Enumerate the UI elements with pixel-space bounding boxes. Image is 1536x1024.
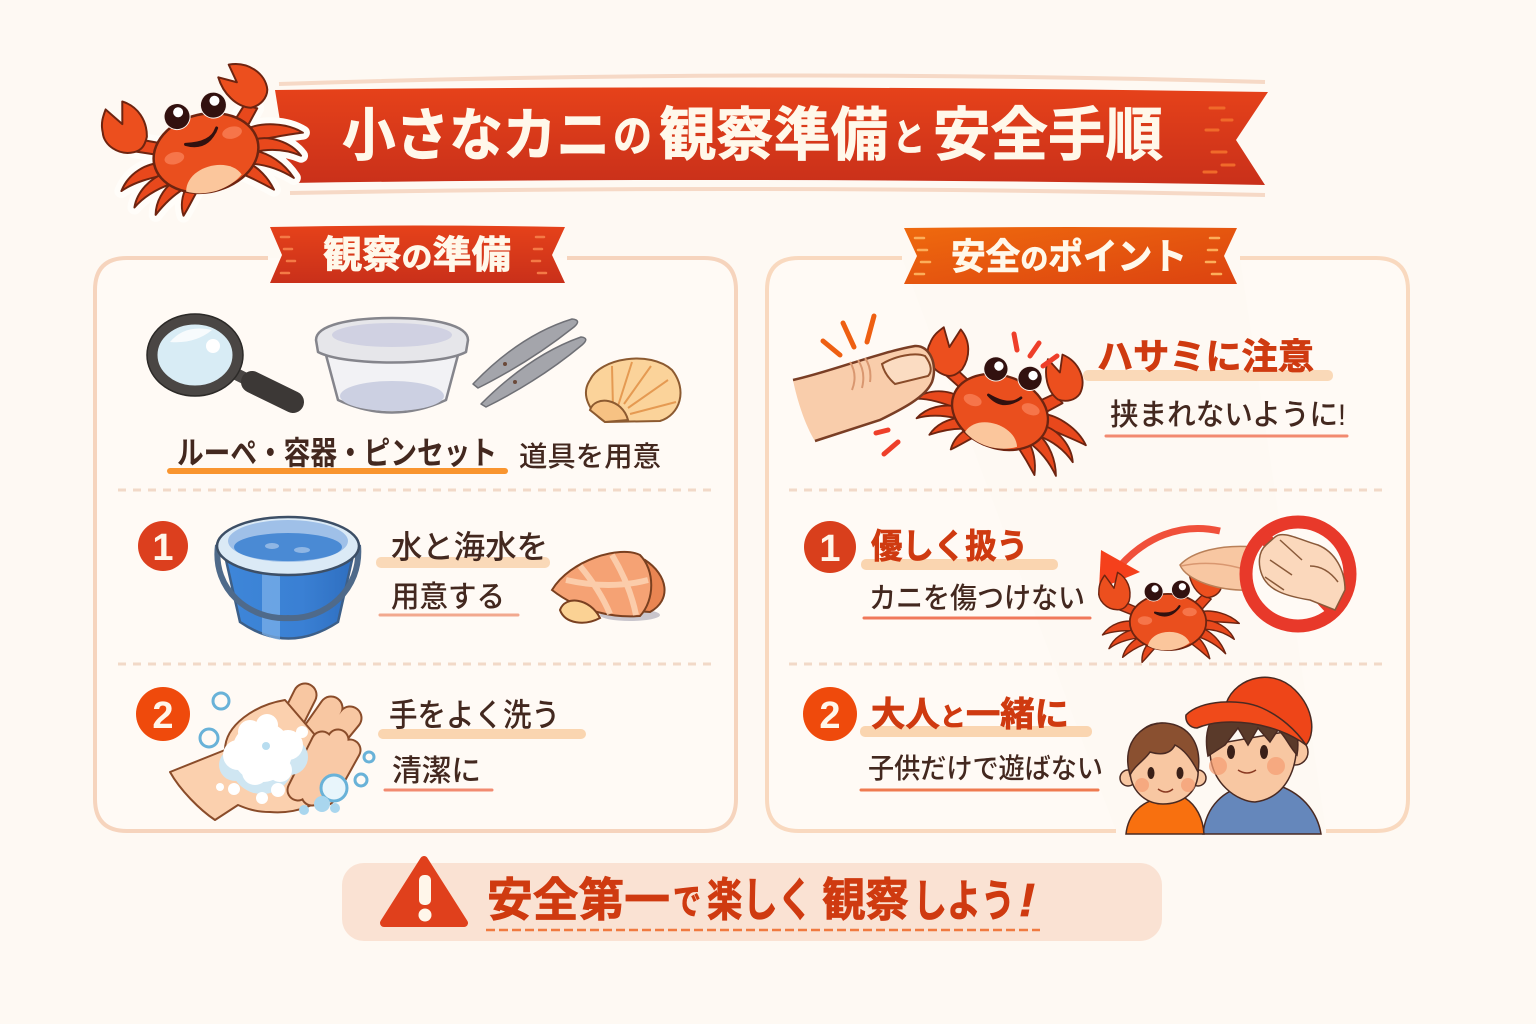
point 2 number <box>803 687 857 741</box>
footer text: 楽しく <box>707 874 813 926</box>
handwashing text <box>378 697 586 790</box>
handwashing text: 手をよく洗う <box>389 697 560 733</box>
point 2 number: 2 <box>819 695 841 737</box>
gentle handling text <box>861 528 1090 618</box>
pincer warning text: ハサミに注意 <box>1097 336 1314 377</box>
step 1 number <box>138 521 188 571</box>
title text: 安全手順 <box>933 103 1163 168</box>
panel heading: preparation <box>270 226 565 283</box>
pincer warning text: 挟まれないように! <box>1110 399 1346 432</box>
adult supervision text: 子供だけで遊ばない <box>868 753 1103 784</box>
adult supervision text <box>860 696 1103 790</box>
title text <box>342 103 1163 168</box>
title text: 観察準備 <box>659 103 888 168</box>
handwashing text: 清潔に <box>392 755 481 788</box>
title text: と <box>893 118 925 160</box>
icon: water bucket <box>217 517 359 640</box>
tools text: 道具を用意 <box>519 441 661 472</box>
panel: safety points <box>767 227 1408 834</box>
panel heading: preparation: 観察の準備 <box>323 235 511 277</box>
water text: 用意する <box>391 581 505 614</box>
footer text: ! <box>1019 874 1035 926</box>
footer text: しよう <box>913 877 1015 926</box>
step 1 number: 1 <box>152 527 174 569</box>
gentle handling text: カニを傷つけない <box>869 582 1085 615</box>
icon: child and adult <box>1120 677 1321 834</box>
icon: warning triangle <box>384 860 464 923</box>
water text: 水と海水を <box>391 529 548 565</box>
icon: scallop shell <box>586 359 681 422</box>
icon: clear container <box>316 318 468 412</box>
panel: preparation <box>95 226 736 831</box>
icon: tweezers <box>473 319 586 407</box>
icon: mascot crab <box>94 52 315 229</box>
panel heading: safety points <box>904 227 1237 284</box>
tools text: ルーペ・容器・ピンセット <box>177 435 497 471</box>
pincer warning text <box>1083 336 1347 436</box>
icon: magnifying glass <box>147 314 293 402</box>
footer text: 観察 <box>822 874 909 926</box>
title text: の <box>613 112 652 161</box>
icon: washing hands <box>170 693 374 820</box>
title banner <box>275 75 1268 195</box>
icon: small crab <box>1099 564 1239 662</box>
adult supervision text: 大人と一緒に <box>871 696 1069 734</box>
gentle handling text: 優しく扱う <box>871 528 1028 566</box>
point 1 number: 1 <box>819 528 841 570</box>
footer text: で <box>673 881 701 922</box>
step 2 number: 2 <box>152 695 174 737</box>
footer text <box>487 874 1035 926</box>
footer text: 安全第一 <box>487 874 670 926</box>
icon: pinching crab and thumb <box>793 311 1112 492</box>
arrow <box>1099 528 1220 589</box>
icon: striped shell <box>552 552 665 623</box>
footer message <box>342 860 1162 941</box>
icon: no touching hand <box>1180 522 1350 626</box>
title text: 小さなカニ <box>342 104 610 168</box>
water text <box>376 529 550 615</box>
point 1 number <box>804 521 856 573</box>
step 2 number <box>136 687 190 741</box>
panel heading: safety points: 安全のポイント <box>951 236 1187 277</box>
